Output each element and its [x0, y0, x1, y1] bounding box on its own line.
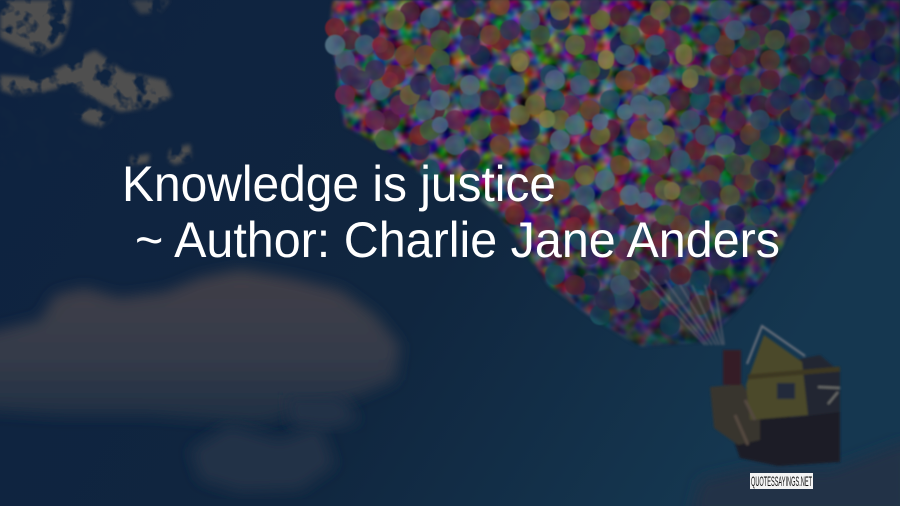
balloons: green [385, 35, 760, 215]
balloons: blue grey [345, 10, 835, 300]
author line: ~ Author: Charlie Jane Anders [135, 212, 780, 268]
house: porch detail [735, 400, 755, 445]
balloons: small accents blue [440, 112, 655, 200]
balloons: orange [405, 5, 770, 305]
house: lower foundation [730, 410, 840, 466]
balloons: small accents red [380, 45, 738, 240]
balloons: magenta [345, 35, 820, 250]
balloons: yellow [395, 10, 775, 270]
balloon right shade [660, 0, 900, 330]
house: porch [710, 384, 760, 445]
quote line: Knowledge is justice [122, 156, 556, 212]
balloon overall shade [320, 0, 900, 350]
balloons: dark crimson [350, 12, 875, 280]
balloons: teal [430, 35, 865, 325]
upper cloud shapes [0, 0, 192, 165]
clouds: large lower cloud [0, 270, 400, 492]
house: roof [747, 326, 805, 364]
balloons: red [335, 25, 860, 285]
upper cloud mottling [0, 0, 200, 170]
quote text [122, 156, 780, 268]
balloon strings [635, 270, 724, 345]
balloons: pale blue [335, 20, 800, 285]
balloons: small accents [520, 52, 690, 192]
balloons [335, 5, 890, 325]
house: facade [746, 335, 808, 420]
watermark box [750, 473, 813, 489]
balloons: purple [350, 5, 870, 300]
balloons: navy [370, 8, 890, 310]
watermark logo [750, 473, 813, 489]
balloon mass base [320, 0, 900, 350]
house: side railing [818, 387, 840, 404]
balloon bottom shade [524, 230, 780, 346]
infographic canvas: QUOTESSAYINGS.NET [751, 473, 812, 489]
house: side wing [790, 355, 840, 418]
house: window [777, 383, 795, 399]
house: trim band [748, 369, 840, 377]
balloon cluster [320, 0, 900, 350]
house [710, 326, 840, 466]
house: chimney [723, 350, 741, 385]
clouds: upper left [0, 0, 200, 170]
clouds: lower right haze [690, 440, 900, 506]
